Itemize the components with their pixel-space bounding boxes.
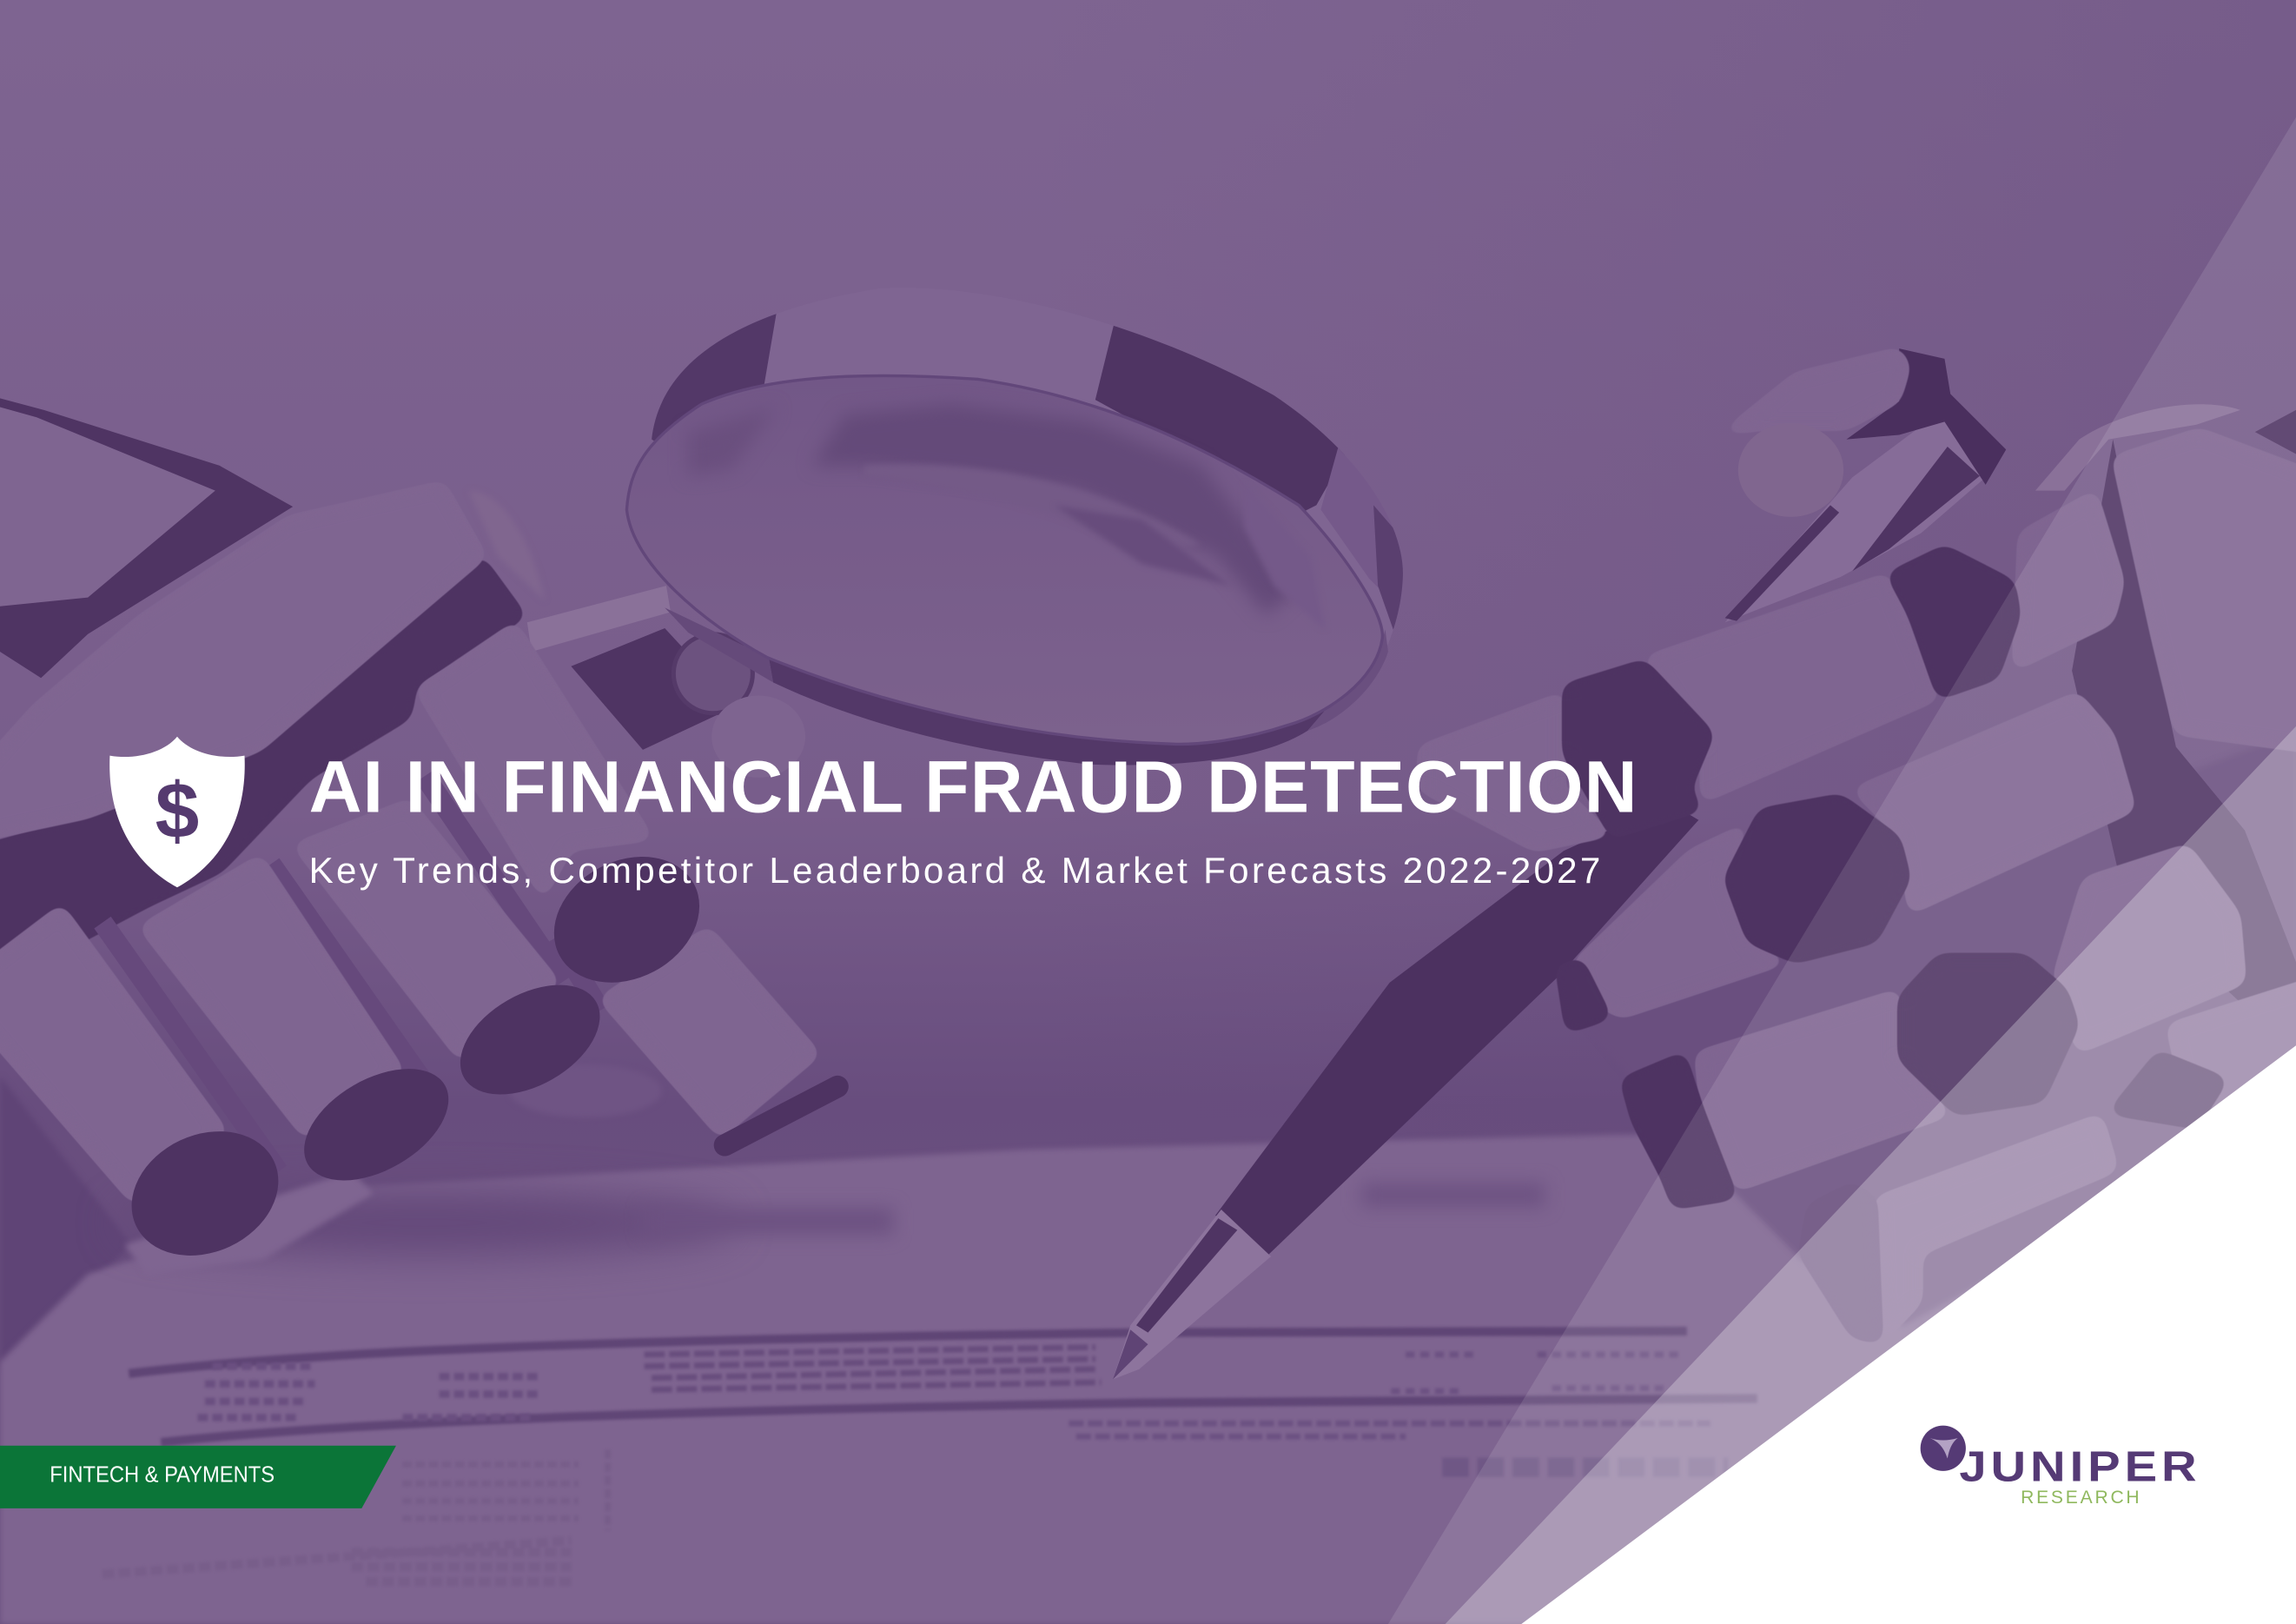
paper document on table [0, 1128, 2296, 1624]
left robot hand [0, 398, 837, 1279]
logo: Juniper Research: RESEARCH [2021, 1488, 2140, 1508]
lens glass [626, 375, 1382, 744]
white corner panel [1521, 1045, 2296, 1624]
translucent diagonal band: large [1388, 117, 2296, 1624]
icon: shield with dollar sign [109, 737, 245, 887]
thumb and ball [1719, 348, 1909, 517]
fingers [1419, 491, 2296, 1342]
finger joints [1557, 547, 2227, 1342]
magnifying glass handle [527, 586, 805, 778]
struts between fingers [103, 776, 600, 1171]
logo: Juniper Research [1921, 1426, 2197, 1508]
logo: Juniper Research: JUNIPER [1959, 1443, 2197, 1491]
soft shapes beneath fingers [124, 1064, 662, 1274]
palm [0, 481, 486, 842]
dark knuckle band [0, 556, 526, 955]
category tab [0, 1446, 396, 1508]
pen barrel [1215, 803, 1698, 1256]
shadow behind fingers [1574, 732, 2296, 1325]
pen upper section and clip [1725, 348, 2006, 622]
translucent diagonal band: small [1446, 726, 2296, 1624]
right robot hand [1419, 348, 2296, 1342]
soft shape behind knuckles [468, 491, 545, 600]
pen metal tip [1113, 1210, 1271, 1380]
finger joints [111, 832, 837, 1279]
title: AI IN FINANCIAL FRAUD DETECTION [309, 746, 1637, 827]
icon: shield with dollar sign: $ [155, 767, 199, 855]
pen [1113, 348, 2006, 1380]
fingers [0, 622, 820, 1203]
category tab: FINTECH & PAYMENTS [50, 1462, 275, 1488]
magnifying glass [625, 314, 1403, 765]
wrist light [2113, 429, 2296, 754]
background finger with dark joint [0, 398, 293, 678]
logo mark [1921, 1426, 1966, 1471]
lens rim back [652, 314, 1403, 645]
subtitle: Key Trends, Competitor Leaderboard & Market Forecasts 2022-2027 [309, 850, 1600, 891]
reflection in lens [688, 404, 1325, 630]
wrist dark [2072, 440, 2296, 1054]
lens thick lower edge [665, 607, 1388, 765]
